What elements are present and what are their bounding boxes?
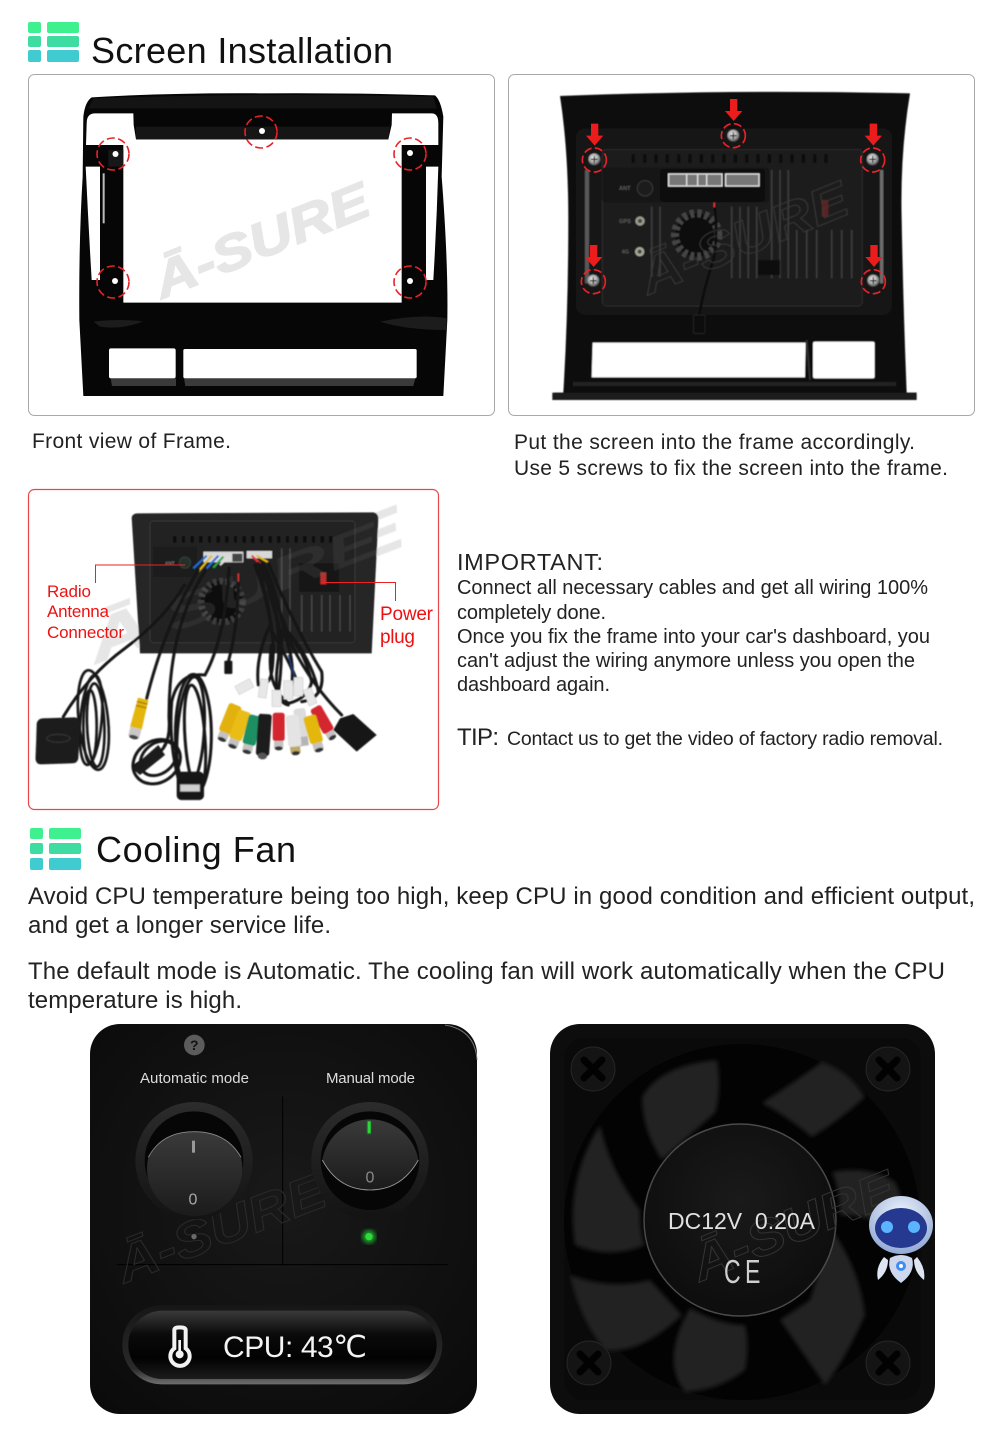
text block: important notice: IMPORTANT: <box>457 549 603 575</box>
panel: fan control UI <box>90 1024 477 1414</box>
caption: rear view <box>514 431 948 480</box>
text block: cooling fan description: temperature is high. <box>28 987 242 1014</box>
knob: manual mode: 0 <box>366 1170 375 1187</box>
label: radio antenna connector <box>47 582 124 642</box>
watermark: A-SURE: Ā-SURE <box>143 171 379 310</box>
label: automatic mode: Automatic mode <box>140 1070 249 1087</box>
RCA connector bundle <box>215 702 339 760</box>
label: radio antenna connector: Radio <box>47 582 91 601</box>
frame: front view <box>79 93 447 396</box>
watermark on rear view: Ā-SURE <box>629 170 858 306</box>
text block: cooling fan description: The default mode is Automatic. The cooling fan will work automatically when the CPU <box>28 958 945 985</box>
knob: automatic mode <box>135 1102 253 1219</box>
panel: screen in frame, rear view <box>508 74 974 416</box>
caption: front view: Front view of Frame. <box>32 430 231 453</box>
frame: rear view: 4G <box>622 250 630 256</box>
caption: rear view: Put the screen into the frame accordingly. <box>514 431 915 454</box>
text block: important notice: completely done. <box>457 602 606 624</box>
yellow RCA <box>127 697 149 740</box>
indicator: automatic off <box>191 1234 197 1239</box>
fan hub: Ā-SURE <box>681 1159 905 1293</box>
leader line: radio antenna <box>96 565 185 583</box>
panel: front view of frame <box>28 74 494 416</box>
frame: rear view: GPS <box>619 219 631 225</box>
frame: rear view <box>552 92 917 400</box>
fan hub <box>644 1124 905 1316</box>
panel: wiring connections: SURE <box>157 512 390 643</box>
fan blades <box>570 1060 908 1392</box>
text block: tip: Contact us to get the video of factory radio removal. <box>507 728 943 750</box>
icon: section list (screen installation) <box>28 22 79 62</box>
knob: manual mode <box>311 1102 429 1219</box>
panel: cooling fan <box>550 1024 935 1414</box>
wire labels <box>235 677 317 707</box>
CPU reading: CPU: 43℃ <box>223 1331 367 1364</box>
cables <box>63 563 342 796</box>
dividers <box>281 1097 284 1264</box>
text block: tip: TIP: <box>457 724 499 751</box>
leader line: power plug <box>322 582 396 601</box>
heading: Cooling Fan: Cooling Fan <box>96 829 296 870</box>
CPU temperature pill <box>122 1305 442 1384</box>
lower openings <box>592 343 806 377</box>
indicator: manual on <box>362 1230 376 1243</box>
text block: important notice <box>457 549 930 696</box>
label: power plug: Power <box>380 604 434 625</box>
screw hole markers <box>97 116 426 298</box>
text block: important notice: dashboard again. <box>457 674 610 696</box>
text block: important notice: can't adjust the wiring anymore unless you open the <box>457 650 915 672</box>
connectors on unit <box>203 552 243 562</box>
label: power plug <box>380 604 434 648</box>
connectors <box>669 174 759 186</box>
label: radio antenna connector: Antenna <box>47 602 110 621</box>
watermark behind unit: Ā-SURE <box>75 494 415 677</box>
fan opening <box>564 1044 920 1400</box>
text block: cooling fan description: Avoid CPU temperature being too high, keep CPU in good condition and efficient output, <box>28 883 975 910</box>
fan hub: DC12V 0.20A <box>668 1208 816 1234</box>
screws <box>587 130 879 287</box>
watermark: Ā-SURE <box>106 1162 335 1294</box>
fan hub: CE <box>724 1254 760 1291</box>
USB plugs <box>132 745 165 775</box>
label: radio antenna connector: Connector <box>47 623 124 642</box>
icon: robot mascot <box>869 1196 933 1283</box>
panel: wiring connections: ANT <box>165 560 175 565</box>
corner screws <box>567 1047 910 1385</box>
caption: rear view: Use 5 screws to fix the screen into the frame. <box>514 457 948 480</box>
red dashed rings and arrows <box>581 99 885 294</box>
text block: cooling fan description <box>28 883 975 1014</box>
head unit rear <box>132 512 378 653</box>
icon: thermometer <box>170 1327 190 1366</box>
label: manual mode: Manual mode <box>326 1070 415 1087</box>
frame: rear view: ANT <box>619 186 631 192</box>
knob: automatic mode: 0 <box>189 1191 198 1208</box>
panel: wiring connections <box>28 490 438 810</box>
GPS antenna <box>36 717 80 764</box>
text block: important notice: Connect all necessary cables and get all wiring 100% <box>457 577 928 599</box>
icon: help <box>184 1035 205 1055</box>
icon: help: ? <box>190 1037 199 1053</box>
heat sink <box>652 170 852 278</box>
heading: Screen Installation: Screen Installation <box>91 30 393 71</box>
black adapter box <box>333 714 377 752</box>
label: power plug: plug <box>380 627 415 648</box>
text block: important notice: Once you fix the frame into your car's dashboard, you <box>457 626 930 648</box>
text block: cooling fan description: and get a longer service life. <box>28 912 331 939</box>
icon: section list (cooling fan) <box>30 828 81 870</box>
